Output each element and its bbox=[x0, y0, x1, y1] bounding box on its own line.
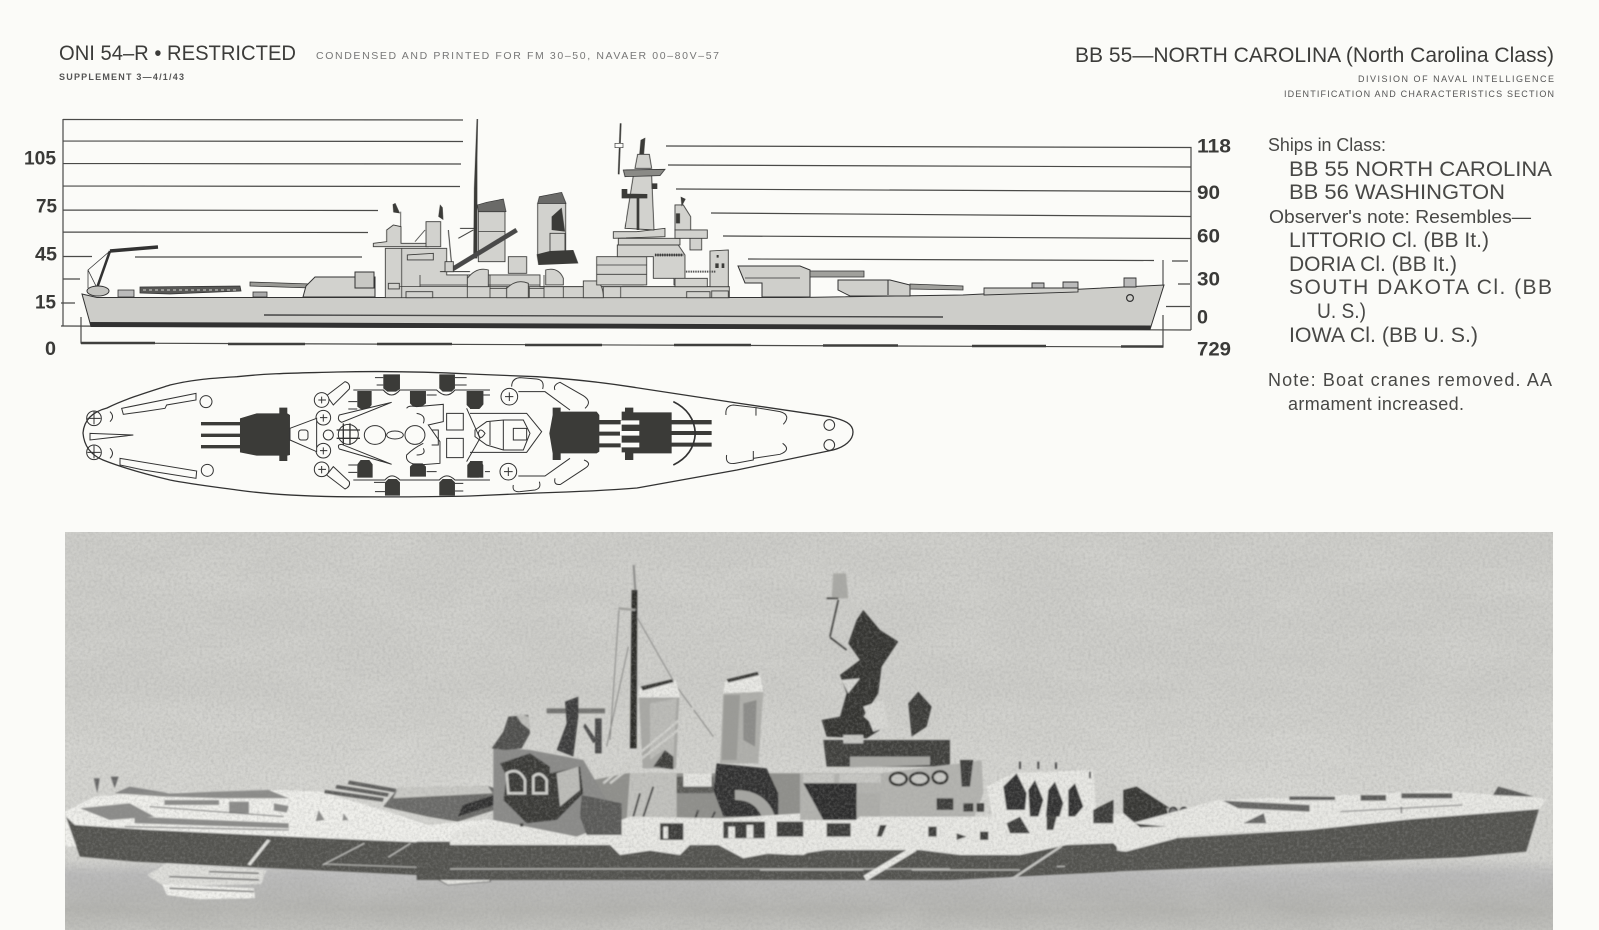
height scale labels left: 45 bbox=[35, 244, 57, 266]
forward block bbox=[686, 250, 728, 287]
forward director bbox=[675, 197, 707, 250]
funnel no 2 bbox=[720, 672, 763, 763]
photo grain overlay bbox=[65, 532, 1553, 930]
forward funnel bbox=[508, 192, 578, 273]
aft crane bbox=[87, 247, 158, 296]
fire control tower bbox=[597, 123, 707, 287]
height and length scale labels right: 90 bbox=[1197, 183, 1220, 204]
sidebar: ships in class and observer's notes: Note: Boat cranes removed. AA bbox=[1268, 370, 1552, 390]
height and length scale labels right: 0 bbox=[1197, 308, 1208, 328]
light deck above hull bbox=[760, 813, 1225, 855]
header: supplement line: SUPPLEMENT 3—4/1/43 bbox=[59, 72, 184, 82]
after deck bbox=[65, 790, 830, 847]
hull profile bbox=[82, 285, 1164, 330]
stern half details bbox=[87, 374, 490, 496]
sidebar: ships in class and observer's notes: DORIA Cl. (BB It.) bbox=[1289, 253, 1457, 276]
length scale dashes bbox=[81, 343, 1163, 346]
after deck clutter bbox=[80, 787, 348, 828]
midships base band bbox=[493, 773, 823, 838]
sidebar: ships in class and observer's notes: IOWA Cl. (BB U. S.) bbox=[1289, 324, 1478, 347]
aft turret plan bbox=[201, 408, 290, 461]
bridge block bbox=[800, 757, 984, 820]
fore superstructure bbox=[760, 757, 1225, 879]
forward deckhouse plan bbox=[470, 388, 570, 480]
height and length scale labels right: 30 bbox=[1197, 270, 1220, 290]
sidebar: ships in class and observer's notes: U. S.) bbox=[1317, 300, 1366, 323]
main deckhouse bbox=[373, 203, 729, 298]
height and length scale labels right: 60 bbox=[1197, 226, 1220, 248]
arches bbox=[467, 269, 643, 298]
after funnel bbox=[477, 199, 506, 262]
boat crane bbox=[440, 228, 517, 272]
foredeck bbox=[1131, 791, 1547, 833]
header: printing note: CONDENSED AND PRINTED FOR FM 30–50, NAVAER 00–80V–57 bbox=[316, 50, 719, 62]
forecastle bbox=[1065, 787, 1547, 873]
sidebar: ships in class and observer's notes: armament increased. bbox=[1288, 394, 1464, 414]
deck gun mounts bbox=[687, 291, 728, 298]
anchor hawse bbox=[1127, 295, 1133, 301]
funnel no 1 bbox=[638, 679, 680, 769]
sidebar: ships in class and observer's notes bbox=[1268, 135, 1552, 414]
side elevation of ship bbox=[82, 119, 1164, 330]
height scale labels left bbox=[24, 148, 57, 360]
A turret bbox=[1123, 787, 1225, 827]
sidebar: ships in class and observer's notes: Observer's note: Resembles— bbox=[1269, 207, 1531, 227]
header: publication title: ONI 54–R • RESTRICTED bbox=[59, 42, 296, 65]
reference photograph of the battleship bbox=[65, 532, 1553, 930]
X turret and barrels bbox=[325, 782, 396, 800]
midships light deckhouse bbox=[627, 763, 778, 837]
sidebar: ships in class and observer's notes: BB 56 WASHINGTON bbox=[1289, 181, 1505, 204]
header: division of naval intelligence: DIVISION OF NAVAL INTELLIGENCE bbox=[1358, 74, 1554, 84]
height scale labels left: 15 bbox=[35, 292, 56, 314]
no.1 and no.2 turrets plan bbox=[549, 402, 712, 465]
deck plan of ship bbox=[83, 372, 853, 497]
sidebar: ships in class and observer's notes: Ships in Class: bbox=[1268, 135, 1386, 155]
mast and rigging bbox=[607, 565, 713, 748]
foredeck markings bbox=[726, 405, 835, 464]
harbor launches bbox=[147, 863, 266, 887]
breakwater and bow mounts bbox=[984, 278, 1136, 295]
accommodation ladders bbox=[249, 840, 269, 865]
sidebar: ships in class and observer's notes: BB 55 NORTH CAROLINA bbox=[1289, 158, 1552, 181]
aircraft rails bbox=[120, 393, 213, 478]
midships section bbox=[417, 565, 1117, 880]
sidebar: ships in class and observer's notes: LITTORIO Cl. (BB It.) bbox=[1289, 229, 1489, 252]
ladders bbox=[865, 848, 915, 878]
midships hull band bbox=[417, 842, 1117, 880]
aft deck catapult and aircraft strip bbox=[118, 286, 241, 297]
forward superfiring turret bbox=[738, 266, 864, 297]
bridge tower bbox=[822, 573, 950, 767]
superstructure, funnels and bridge tower bbox=[373, 119, 729, 298]
jackstaff bbox=[1162, 260, 1164, 285]
stern rings bbox=[87, 411, 133, 460]
forecastle fittings bbox=[1223, 801, 1310, 823]
crane boom bbox=[603, 708, 695, 783]
arched gun shields bbox=[987, 762, 1113, 833]
stern section bbox=[65, 777, 830, 899]
secondary mounts bbox=[348, 374, 490, 496]
height scale labels left: 0 bbox=[45, 339, 56, 360]
ship in photo bbox=[65, 565, 1547, 899]
height and length scale labels right: 729 bbox=[1197, 340, 1231, 360]
central bridge works bbox=[290, 402, 480, 465]
header: ship title: BB 55—NORTH CAROLINA (North Carolina Class) bbox=[1075, 44, 1554, 67]
aft turret bbox=[250, 272, 375, 297]
hull dark band bbox=[66, 817, 830, 879]
height and length scale labels right bbox=[1197, 136, 1231, 360]
deck openings and guns bbox=[827, 800, 1113, 840]
hull forward bbox=[1065, 809, 1539, 873]
header: section name: IDENTIFICATION AND CHARACTERISTICS SECTION bbox=[1284, 89, 1554, 99]
boats on forecastle bbox=[512, 378, 589, 492]
forward low turret bbox=[838, 280, 963, 296]
photo sky and water background bbox=[65, 532, 1553, 930]
bow half details bbox=[470, 378, 835, 492]
main mast bbox=[473, 119, 478, 258]
height scale labels left: 105 bbox=[24, 148, 56, 170]
after aft structure bbox=[492, 697, 630, 837]
deck outline bbox=[83, 372, 853, 497]
sidebar: ships in class and observer's notes: SOUTH DAKOTA Cl. (BB bbox=[1289, 276, 1552, 299]
height scale labels left: 75 bbox=[36, 196, 57, 218]
height and length scale labels right: 118 bbox=[1197, 136, 1231, 158]
side elevation scale grid bbox=[61, 119, 1191, 347]
boat capsules and AA rings bbox=[314, 382, 350, 489]
deck band with camouflage scallops bbox=[450, 795, 950, 869]
